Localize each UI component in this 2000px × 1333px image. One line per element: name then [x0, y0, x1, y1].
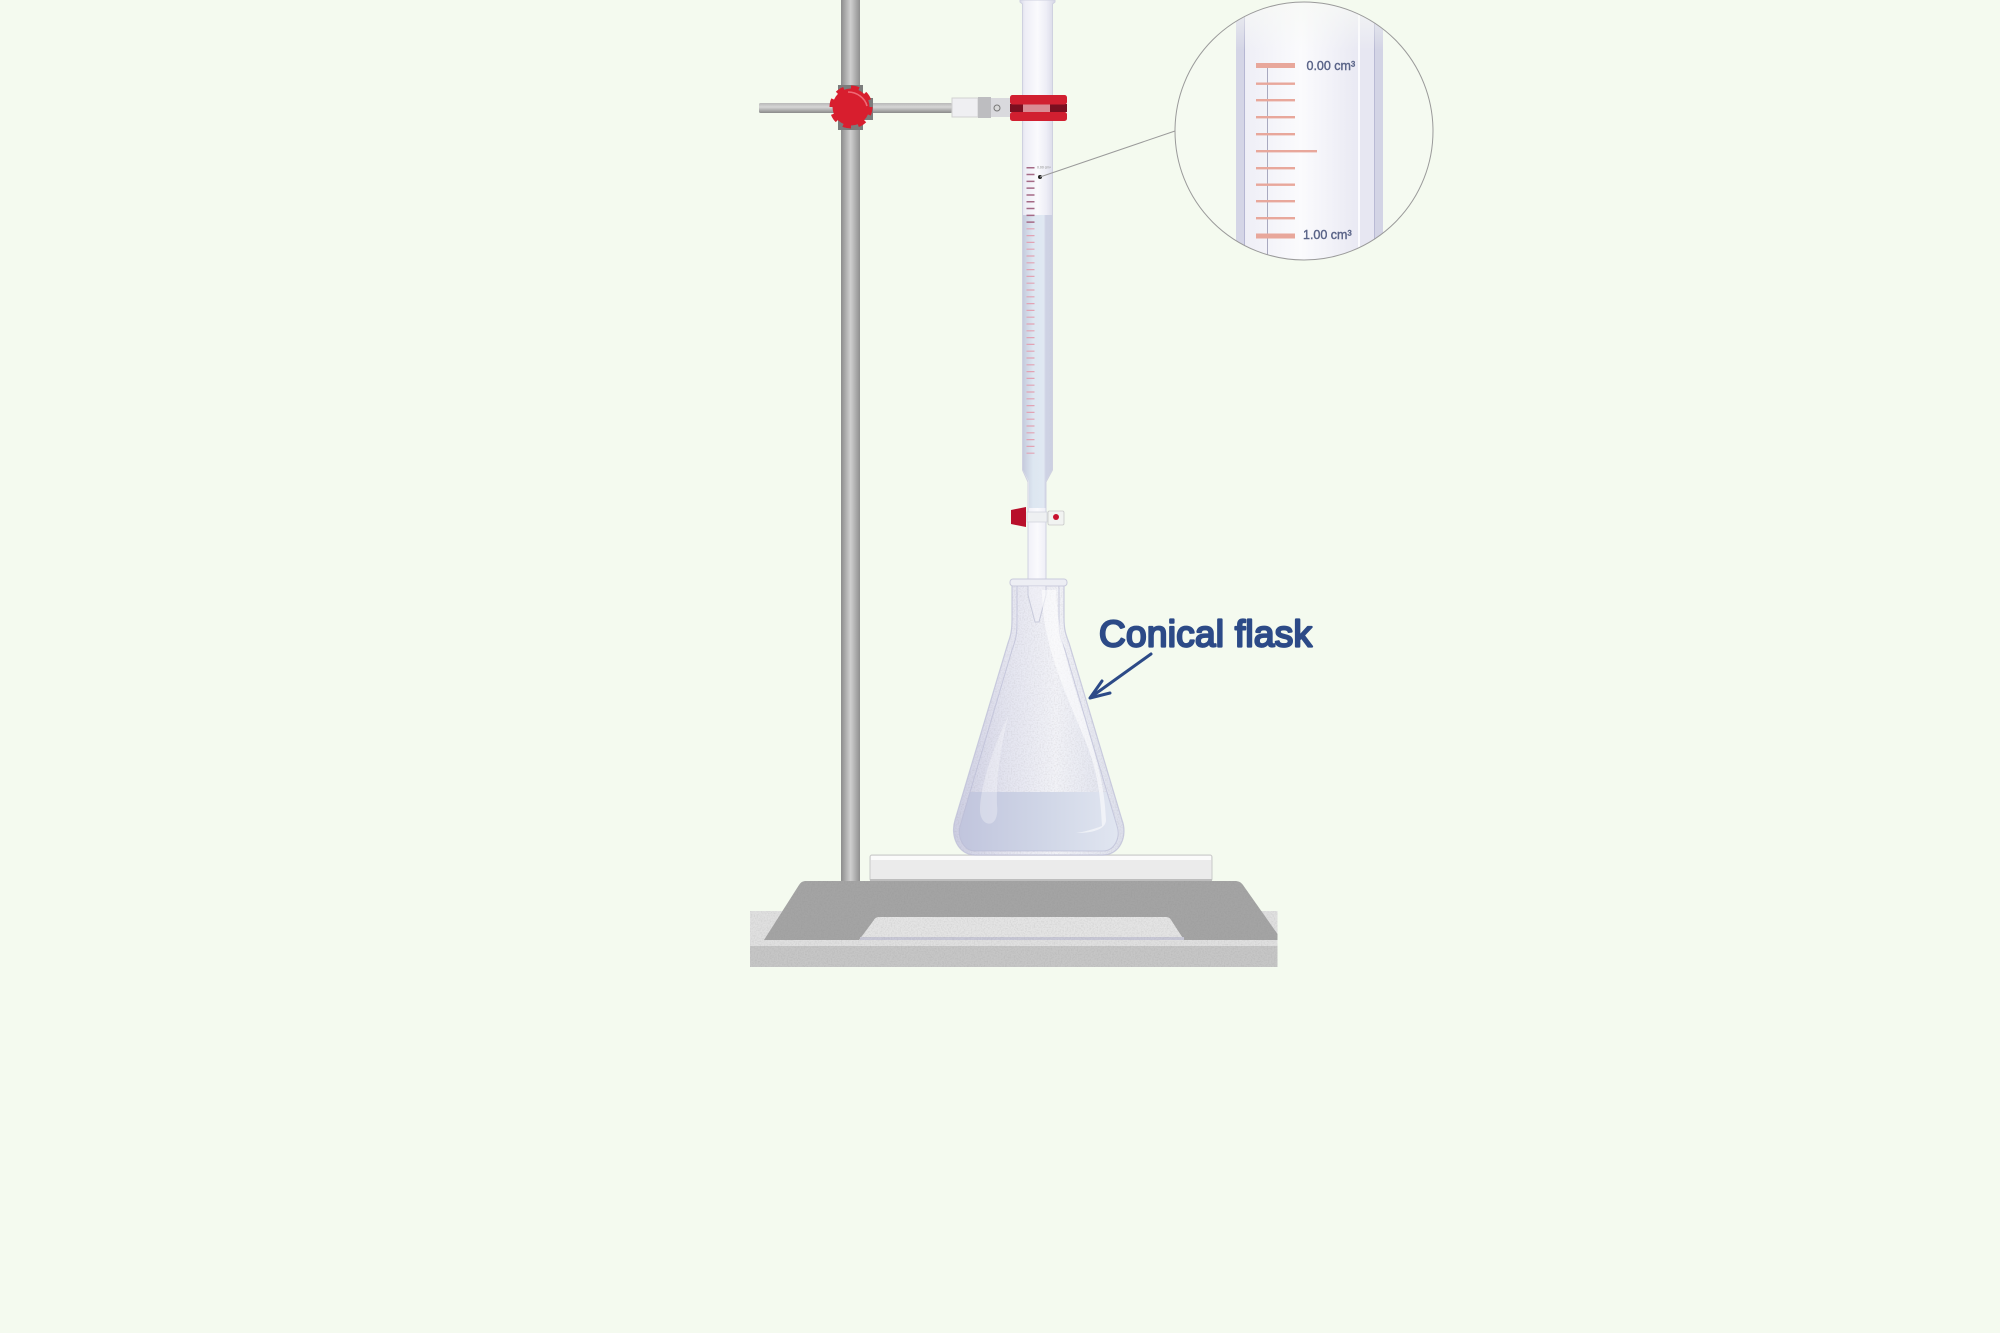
magnifier [1175, 0, 1433, 262]
reading: 1.00 cm3: 1.00 cm³ [1303, 228, 1352, 242]
zoom point [1038, 175, 1042, 179]
flask inner wall [959, 586, 1118, 851]
label arrow [1090, 654, 1151, 698]
burette tip seen through neck [1028, 586, 1046, 622]
burette [1020, 0, 1055, 622]
retort stand rod [841, 0, 860, 882]
bench surface [750, 911, 1278, 967]
flask rim [1010, 579, 1067, 586]
retort stand base [764, 881, 1278, 940]
magnified burette [1236, 0, 1383, 262]
magnified scale ticks [1256, 63, 1317, 238]
white tile [870, 855, 1212, 881]
left reflection [980, 717, 1008, 824]
titration apparatus illustration [750, 0, 1434, 967]
conical flask [950, 579, 1130, 855]
magnifier connector line [1040, 131, 1175, 177]
upper graduation marks [1026, 167, 1034, 226]
reading: 0.00 cm3: 0.00 cm³ [1306, 59, 1355, 73]
right reflection [1042, 590, 1106, 833]
magnifier outline [1175, 2, 1433, 260]
tiny zero label: 0.00 cm³ [1037, 166, 1051, 170]
lower graduation marks [1026, 228, 1034, 454]
horizontal rod [759, 103, 952, 113]
clamp arm and boss head [759, 85, 952, 130]
burette clamp [952, 95, 1067, 121]
label: Conical flask: Conical flask [1099, 614, 1312, 654]
boss block [838, 85, 873, 130]
flask glass [954, 586, 1124, 855]
burette liquid [1023, 215, 1052, 508]
burette glass [1020, 0, 1055, 622]
flask liquid [960, 792, 1118, 851]
outer wall tint [954, 586, 1124, 855]
stopcock [1011, 507, 1064, 527]
red knob [832, 88, 870, 126]
